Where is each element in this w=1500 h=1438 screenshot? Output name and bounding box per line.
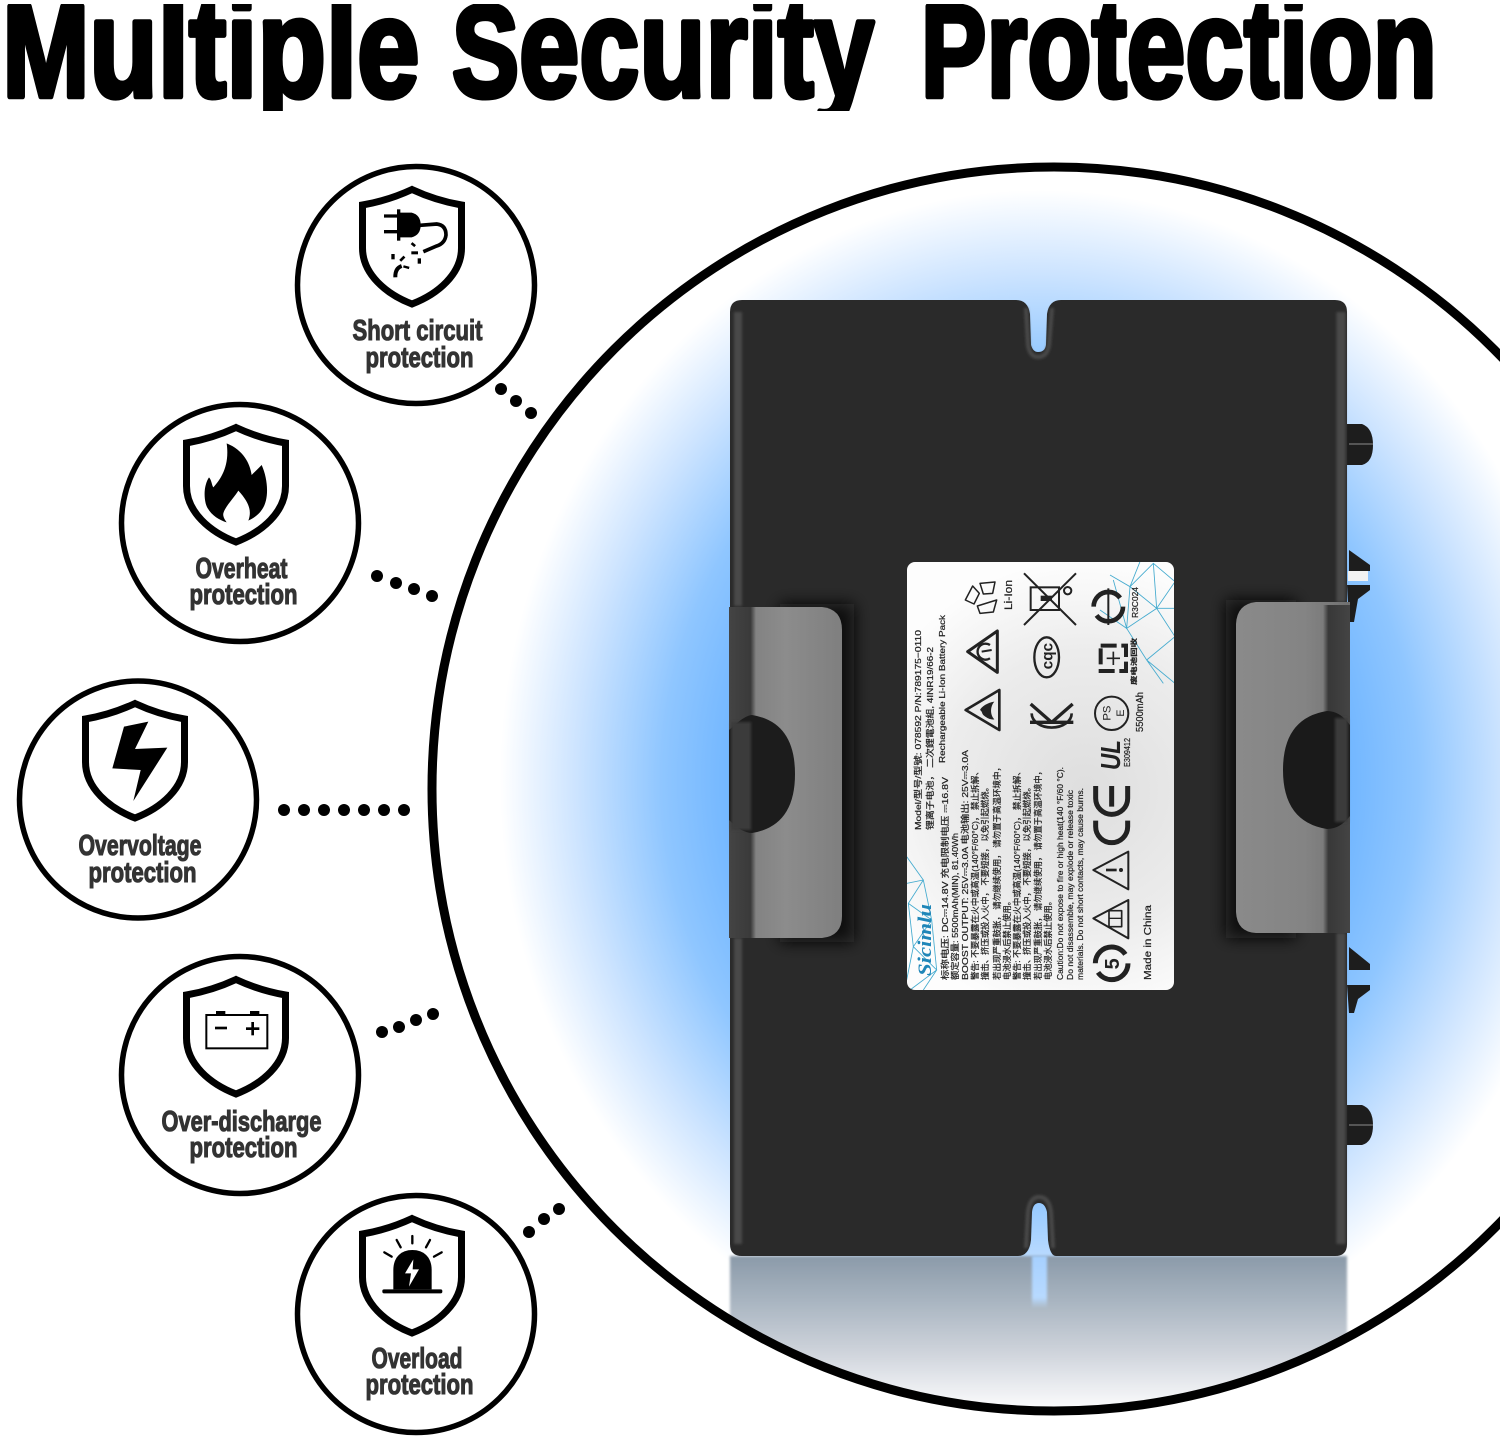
badge text: protection — [190, 1132, 298, 1164]
badge circle — [298, 1196, 534, 1432]
label text lines: Made in China — [1142, 905, 1154, 980]
label text lines: E309412 — [1122, 738, 1132, 767]
side clips — [1347, 424, 1373, 1145]
label text lines: 若出现严重鼓胀， 请勿继续使用， 请勿置于高温环境中， — [1032, 767, 1043, 980]
label text lines: 电池浸水后禁止使用。 — [1001, 897, 1012, 980]
blue glow background — [512, 203, 1500, 1258]
connector dots 1 — [495, 383, 537, 419]
badge text — [366, 1343, 474, 1401]
label text lines: R3C024 — [1130, 587, 1140, 618]
left metal tab — [729, 607, 842, 938]
label text lines: 电池浸水后禁止使用。 — [1042, 897, 1053, 980]
badge text — [162, 1106, 322, 1164]
badge text: Overload — [372, 1343, 462, 1375]
product label — [907, 562, 1175, 990]
title — [7, 4, 1432, 111]
connector dots 5 — [523, 1203, 565, 1238]
mark: fire warning — [966, 690, 999, 730]
badge text — [190, 553, 298, 611]
badge text: protection — [366, 342, 474, 374]
mark: 5 in circle — [1095, 947, 1128, 980]
mark: crossed bin — [1024, 573, 1076, 625]
connector dots 3 — [278, 804, 410, 816]
mark: recycling — [965, 582, 997, 613]
label certification marks — [965, 573, 1128, 980]
label text lines: Do not disassemble, may explode or release toxic — [1065, 789, 1075, 980]
badge text: Overvoltage — [78, 830, 202, 862]
shield outline — [86, 704, 184, 818]
icon: alarm beacon — [382, 1236, 442, 1293]
mark: R3C circle — [1094, 588, 1123, 625]
mark: CQC: cqc — [1040, 642, 1057, 669]
mark: 5 in circle: 5 — [1102, 958, 1124, 969]
label text lines: 警告: 不要暴露在火中或高温(140°F/60°C)， 禁止拆解、 — [1011, 767, 1022, 980]
shadows beside tabs — [780, 600, 1296, 942]
mark: battery recycling — [1101, 646, 1126, 671]
label text lines: 撞击、挤压或投入火中， 不要短接， 以免引起燃烧。 — [979, 783, 990, 980]
badge circle — [122, 404, 358, 642]
label text lines: 5500mAh — [1135, 692, 1146, 732]
badge text: Short circuit — [352, 315, 483, 347]
mark: PSE — [1095, 697, 1128, 730]
connector dots 2 — [371, 570, 438, 602]
label text lines: materials. Do not short contacts, may cause burns. — [1075, 788, 1085, 980]
right metal tab — [1236, 602, 1350, 933]
label network pattern — [907, 562, 1175, 990]
label text lines: 若出现严重鼓胀， 请勿继续使用， 请勿置于高温环境中， — [991, 763, 1002, 980]
label text lines: 锂离子电池， 二次鋰電池組, 4INR19/66-2 — [924, 647, 935, 830]
badge: over-discharge protection — [122, 956, 358, 1194]
mark: CQC — [1034, 637, 1059, 677]
badge text: protection — [88, 857, 196, 889]
label text lines: Sicimlu — [915, 904, 936, 976]
badge text: Overheat — [196, 553, 288, 585]
badge circle — [20, 681, 256, 918]
badge: overvoltage protection — [20, 681, 256, 918]
large circle with product photo — [420, 160, 1500, 1420]
mark: CE — [1096, 786, 1128, 843]
shield outline — [362, 190, 462, 304]
label text lines: Rechargeable Li-Ion Battery Pack — [937, 614, 947, 763]
badge: overload protection — [298, 1196, 534, 1432]
label text lines: 警告: 不要暴露在火中或高温(140°F/60°C)， 禁止拆解、 — [969, 767, 980, 980]
label text lines — [912, 580, 1154, 980]
battery body — [730, 300, 1347, 1256]
label text lines: Li-Ion — [1003, 580, 1015, 610]
mark: UL: UL — [1095, 740, 1126, 770]
mark: KC — [1030, 704, 1073, 728]
label text lines: Model/型号/型號: 078592 P/N:789175−0110 — [912, 630, 923, 830]
badge text — [78, 830, 202, 889]
badge text: Over-discharge — [162, 1106, 322, 1138]
label text lines: BOOST OUTPUT: 25V⎓3.0A 电池输出: 25V⎓3.0A — [959, 750, 970, 980]
shield outline — [186, 428, 286, 542]
icon: lightning bolt — [112, 722, 167, 801]
label text lines: Caution:Do not expose to fire or high heat(140 °F/60 °C). — [1055, 767, 1065, 980]
badge text: protection — [366, 1369, 474, 1401]
icon: broken plug — [384, 209, 446, 277]
label text lines: 额定容量: 5500mAh(MIN), 81.40Wh — [949, 833, 960, 980]
label text lines: 废电池回收 — [1129, 637, 1138, 685]
mark: PSE: E — [1115, 710, 1127, 717]
label text lines: 撞击、挤压或投入火中， 不要短接， 以免引起燃烧。 — [1021, 783, 1032, 980]
mark: PSE: PS — [1102, 705, 1114, 721]
circle outline — [432, 167, 1500, 1411]
battery edge highlights — [738, 308, 1341, 1248]
badge text: protection — [190, 579, 298, 611]
badge text — [352, 315, 483, 374]
connector dots 4 — [376, 1008, 439, 1038]
badge circle — [298, 166, 534, 404]
shield outline — [186, 980, 286, 1094]
mark: warning triangle — [1093, 852, 1128, 889]
label text lines: 标称电压: DC⎓14.8V 充电限制电压 ⎓16.8V — [939, 777, 950, 980]
badge: short circuit protection — [298, 166, 534, 404]
icon: flame — [205, 443, 267, 522]
badge: overheat protection — [122, 404, 358, 642]
badge circle — [122, 956, 358, 1194]
mark: RCM triangle — [968, 631, 997, 672]
mark: manual triangle — [1093, 900, 1128, 938]
shield outline — [362, 1218, 462, 1333]
reflection under battery — [730, 1256, 1347, 1408]
icon: battery — [206, 1011, 267, 1048]
